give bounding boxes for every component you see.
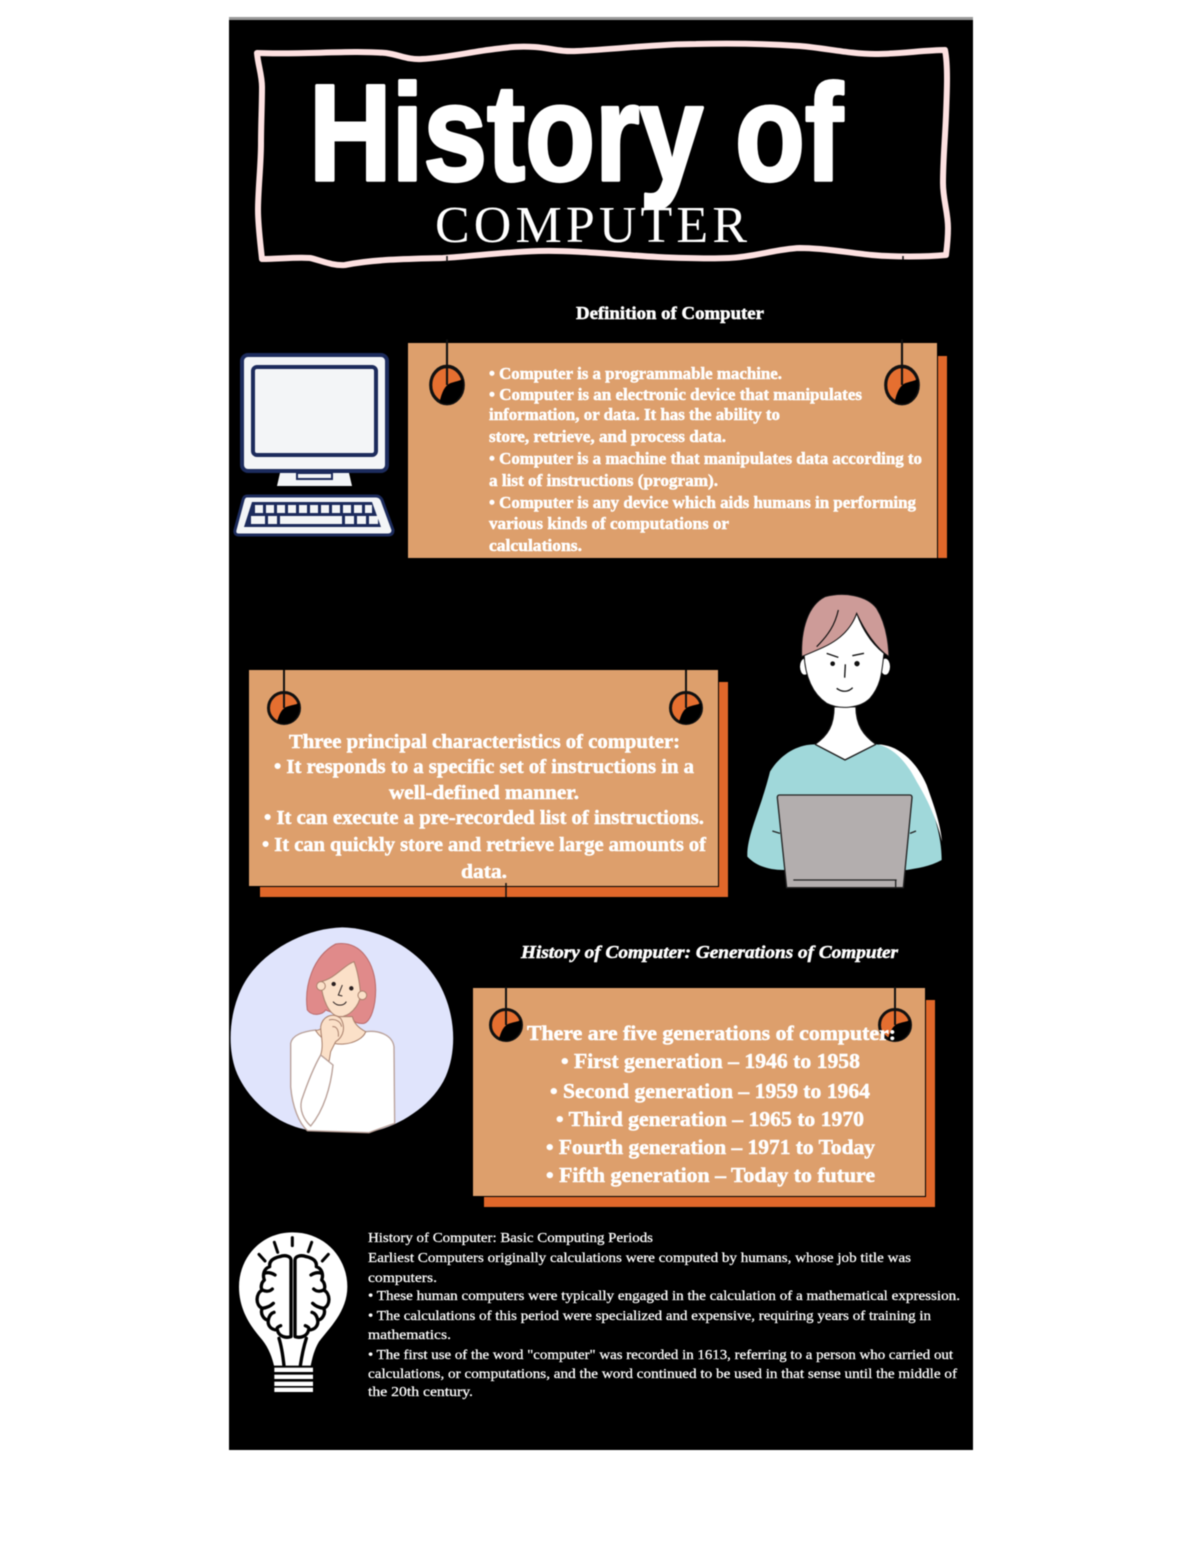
text block: basic computing periods: mathematics. xyxy=(368,1327,451,1342)
text block: basic computing periods: • The calculations of this period were specialized and expensive, requiring years of training in xyxy=(368,1308,931,1323)
characteristics text: well-defined manner. xyxy=(389,783,579,804)
heading: Definition of Computer: Definition of Computer xyxy=(576,303,764,323)
bulb xyxy=(239,1232,347,1366)
icon: light bulb with brain xyxy=(239,1232,347,1392)
generations text: • Fourth generation – 1971 to Today xyxy=(546,1135,876,1159)
panel body xyxy=(249,670,718,886)
characteristics text: • It can quickly store and retrieve large amounts of xyxy=(262,835,707,856)
text block: basic computing periods: • These human computers were typically engaged in the calculation of a mathematical expression. xyxy=(368,1288,960,1303)
definition text: • Computer is an electronic device that manipulates xyxy=(489,385,863,404)
generations text: • First generation – 1946 to 1958 xyxy=(561,1049,860,1073)
panel shadow xyxy=(260,682,728,897)
face xyxy=(804,613,884,707)
monitor xyxy=(242,355,387,471)
characteristics text: Three principal characteristics of computer: xyxy=(289,732,680,753)
icon: desktop computer xyxy=(235,355,393,535)
definition text: various kinds of computations or xyxy=(489,514,729,533)
shirt xyxy=(291,1030,395,1133)
circle background xyxy=(231,927,453,1132)
panel body xyxy=(408,343,937,558)
pin right xyxy=(886,339,918,404)
black poster background xyxy=(229,17,973,1450)
eyes and smile xyxy=(332,982,353,1005)
hair xyxy=(307,944,376,1023)
definition text: store, retrieve, and process data. xyxy=(489,427,726,446)
generations text: • Fifth generation – Today to future xyxy=(546,1163,875,1187)
text block: basic computing periods: Earliest Computers originally calculations were computed by humans, whose job title was xyxy=(368,1250,911,1265)
bulb base xyxy=(274,1368,313,1392)
panel: generations xyxy=(473,987,935,1207)
stand xyxy=(277,473,352,486)
illustration: thinking woman xyxy=(231,927,453,1133)
hair strand xyxy=(817,610,838,647)
panel body xyxy=(473,988,925,1196)
rays xyxy=(259,1238,328,1261)
pin right xyxy=(880,987,911,1041)
sleeve xyxy=(301,1055,333,1126)
laptop xyxy=(777,795,912,888)
neck xyxy=(815,707,876,760)
panel shadow xyxy=(938,356,947,558)
definition text: calculations. xyxy=(489,536,582,555)
definition text: • Computer is a machine that manipulates data according to xyxy=(489,449,922,468)
hair xyxy=(802,594,889,657)
text block: basic computing periods: calculations, or computations, and the word continued to be used in that sense until the middle of xyxy=(368,1366,958,1381)
title: History of: History of xyxy=(309,57,843,210)
definition text xyxy=(489,364,922,555)
sweater xyxy=(747,744,942,870)
text block: basic computing periods: the 20th century. xyxy=(368,1384,473,1399)
hand and arm xyxy=(321,1015,343,1062)
characteristics text: data. xyxy=(461,862,507,883)
sweater highlight xyxy=(878,744,942,842)
facial features xyxy=(827,653,864,691)
characteristics text: • It responds to a specific set of instructions in a xyxy=(274,757,694,778)
title: COMPUTER: COMPUTER xyxy=(435,197,747,254)
panel shadow xyxy=(484,1000,935,1207)
panel: definition xyxy=(408,339,947,558)
text block: basic computing periods: History of Computer: Basic Computing Periods xyxy=(368,1230,653,1245)
generations text: • Third generation – 1965 to 1970 xyxy=(556,1107,864,1131)
neck and chest xyxy=(316,1017,366,1044)
characteristics text xyxy=(262,732,707,883)
laptop base line xyxy=(772,831,916,888)
keyboard xyxy=(235,496,393,535)
definition text: a list of instructions (program). xyxy=(489,471,718,490)
ears xyxy=(317,982,367,1000)
heading: Generations of Computer: History of Computer: Generations of Computer xyxy=(520,942,899,962)
fingers xyxy=(329,1020,342,1037)
panel: characteristics xyxy=(249,670,728,897)
pin left xyxy=(490,987,522,1041)
wavy title frame xyxy=(257,44,948,265)
pin right xyxy=(670,670,702,724)
frame tick marks xyxy=(447,256,903,262)
definition text: • Computer is a programmable machine. xyxy=(489,364,782,383)
generations text: There are five generations of computer: xyxy=(527,1021,896,1045)
pin string tick xyxy=(505,883,507,897)
generations text: • Second generation – 1959 to 1964 xyxy=(550,1079,870,1103)
definition text: • Computer is any device which aids humans in performing xyxy=(489,493,917,512)
screen xyxy=(253,367,376,455)
brain xyxy=(257,1256,329,1366)
face xyxy=(321,962,361,1017)
text block: basic computing periods xyxy=(368,1230,960,1399)
title block xyxy=(257,44,948,265)
definition text: information, or data. It has the ability to xyxy=(489,405,780,424)
ears xyxy=(800,659,890,675)
stand notch xyxy=(297,473,332,479)
pin left xyxy=(268,670,300,724)
pin left xyxy=(431,339,463,404)
collar line xyxy=(815,744,876,760)
characteristics text: • It can execute a pre-recorded list of instructions. xyxy=(264,808,704,829)
text block: basic computing periods: • The first use of the word "computer" was recorded in 1613, referring to a person who carried out xyxy=(368,1347,953,1362)
illustration: man with laptop xyxy=(747,594,942,888)
text block: basic computing periods: computers. xyxy=(368,1270,437,1285)
generations text xyxy=(527,1021,896,1187)
